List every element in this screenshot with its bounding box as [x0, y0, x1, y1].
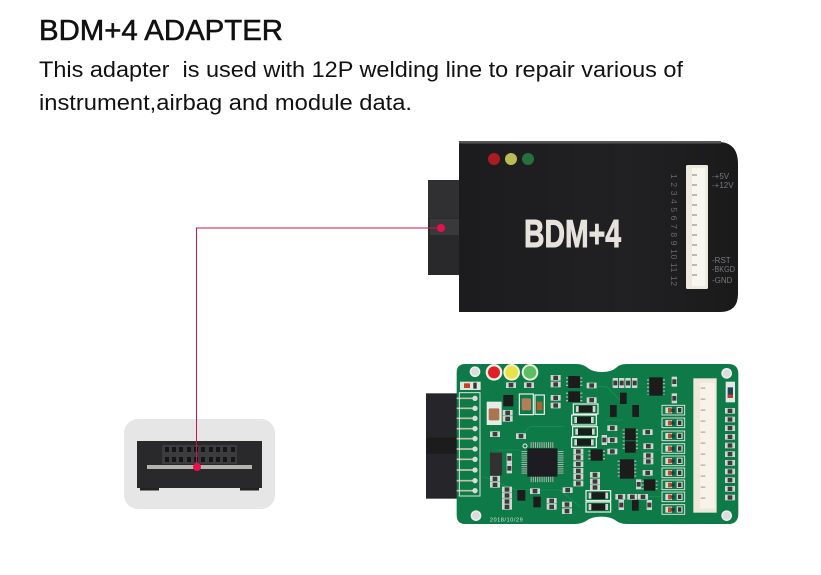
white 12-pin socket	[693, 378, 717, 513]
pin numbers: 1 2 3 4 5 6 7 8 9 10 11 12	[669, 174, 679, 286]
title: BDM+4 ADAPTER	[39, 15, 283, 47]
white jumper blocks	[572, 404, 611, 512]
enclosure	[459, 142, 738, 312]
top-right LED chip	[460, 382, 735, 402]
status LEDs	[488, 153, 534, 165]
description text: This adapter is used with 12P welding line to repair various of	[39, 57, 684, 82]
pin labels: -+12V	[712, 181, 734, 190]
main microcontroller	[523, 444, 561, 479]
capacitors	[487, 394, 544, 425]
board date: 2018/10/29	[490, 517, 523, 523]
white 12-pin socket	[686, 165, 708, 289]
pin labels: -GND	[712, 276, 733, 285]
black connector	[426, 393, 458, 499]
panel: connector end view	[124, 419, 275, 509]
pin labels: -+5V	[712, 172, 730, 181]
connector pins	[457, 398, 475, 491]
pin socket grid	[162, 445, 237, 464]
pin labels	[712, 172, 735, 285]
mounting holes	[470, 367, 731, 520]
connector plug	[428, 180, 459, 275]
product label: BDM+4	[524, 213, 621, 256]
green PCB	[457, 364, 738, 524]
pin labels: -BKGD	[712, 265, 735, 274]
bare circuit board	[426, 364, 738, 524]
pin labels: -RST	[712, 256, 731, 265]
integrated circuits	[490, 376, 663, 511]
description text: instrument,airbag and module data.	[39, 90, 412, 115]
connector housing	[137, 441, 262, 488]
callout line linking plug to end view	[193, 224, 445, 471]
LEDs	[486, 364, 538, 381]
description text	[39, 57, 684, 115]
diode column	[662, 405, 685, 514]
metal slot	[147, 465, 252, 469]
IC leads	[567, 377, 664, 490]
resistors	[490, 375, 735, 514]
adapter in black enclosure	[428, 141, 738, 312]
